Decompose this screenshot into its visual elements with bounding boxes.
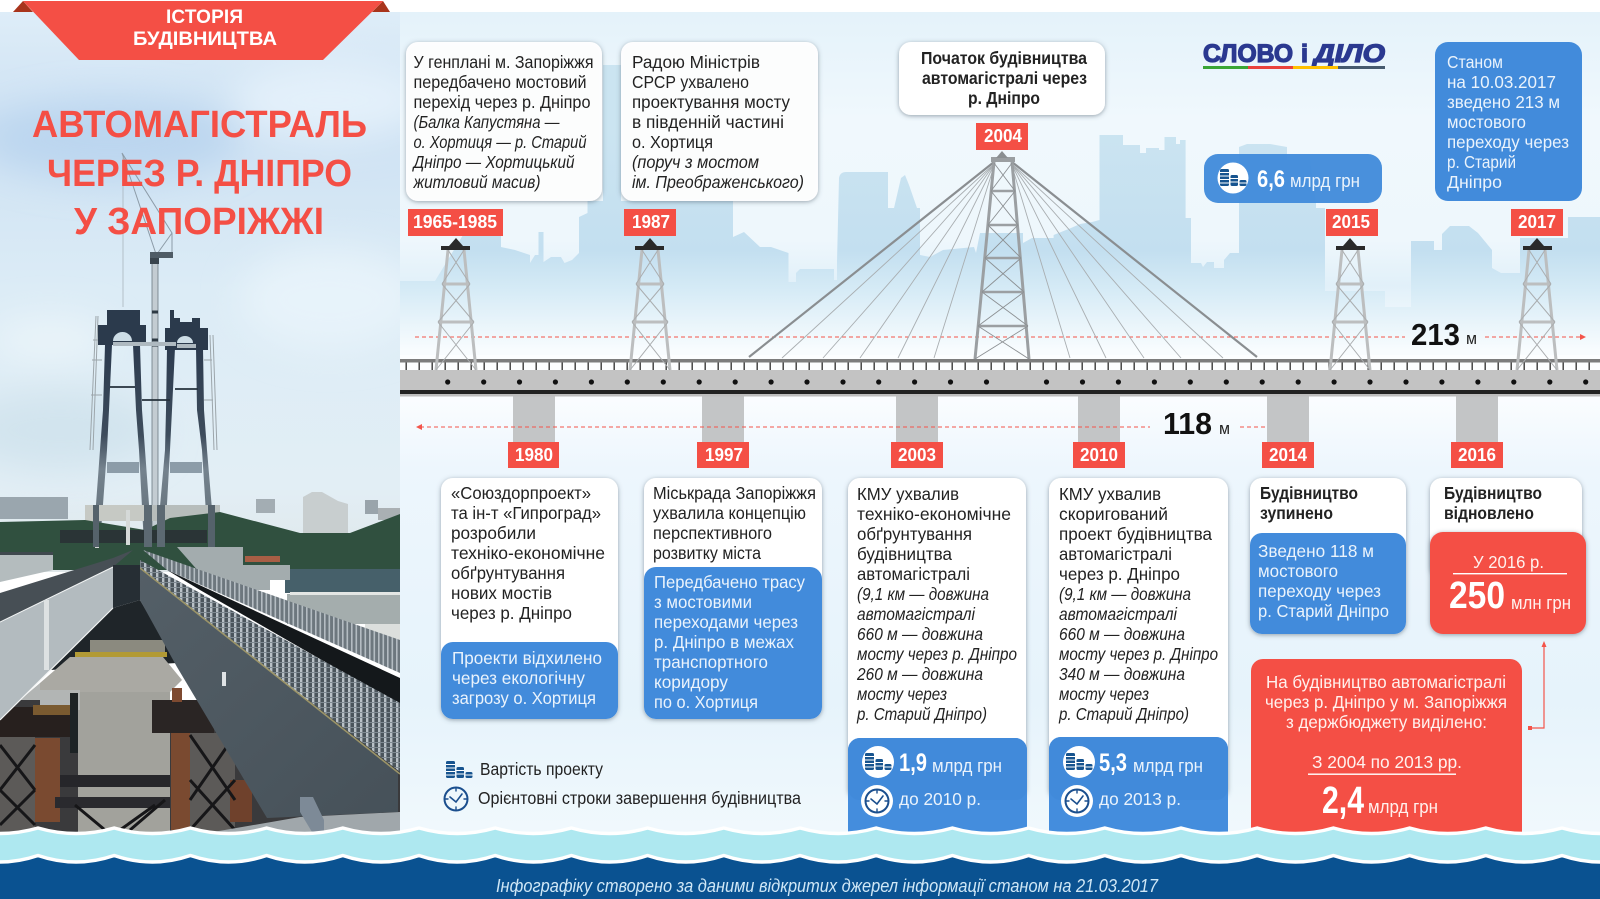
card 1965-1985: general plan: передбачено мостовий bbox=[414, 72, 586, 92]
city skyline silhouette bbox=[400, 65, 1600, 355]
card 2003: feasibility study bbox=[848, 478, 1027, 845]
card 2003: feasibility study: р. Старий Дніпро) bbox=[856, 704, 987, 724]
logo: Слово і Діло: і bbox=[1301, 40, 1308, 68]
card 1980: Soyuzdorproekt: розробили bbox=[451, 523, 536, 543]
panel: state budget funding: З 2004 по 2013 рр. bbox=[1312, 752, 1462, 772]
callout: 6,6 billion: млрд грн bbox=[1290, 171, 1360, 191]
year tag 2016 bbox=[1451, 442, 1503, 468]
card 2017: status as of 10.03.2017: р. Старий bbox=[1447, 152, 1516, 172]
value label 213 m: м bbox=[1466, 329, 1477, 348]
title bbox=[32, 104, 367, 243]
card 1980: Soyuzdorproekt: обґрунтування bbox=[451, 563, 565, 583]
card 2010: corrected project: автомагістралі bbox=[1059, 544, 1172, 564]
card 1965-1985: general plan: о. Хортиця — р. Старий bbox=[414, 132, 587, 152]
card 1987: Council of Ministers: Радою Міністрів bbox=[632, 52, 760, 72]
water waves bbox=[0, 828, 1600, 899]
card 1987: Council of Ministers: СРСР ухвалено bbox=[632, 72, 749, 92]
river and embankment bbox=[285, 569, 400, 593]
value label 118 m: 118 bbox=[1163, 406, 1212, 441]
card 2003: feasibility study: автомагістралі bbox=[857, 564, 970, 584]
year tag 2015: 2015 bbox=[1332, 212, 1370, 232]
year tag 2014 bbox=[1262, 442, 1314, 468]
logo: Слово і Діло: ДІЛО bbox=[1312, 40, 1386, 68]
ribbon header: БУДІВНИЦТВА bbox=[133, 29, 277, 50]
year tag 1987: 1987 bbox=[632, 212, 670, 232]
callout: 6,6 billion bbox=[1204, 154, 1382, 203]
card 2010: corrected project: млрд грн bbox=[1133, 756, 1203, 776]
card 2003: feasibility study: обґрунтування bbox=[857, 524, 972, 544]
card 2004: start of construction: р. Дніпро bbox=[968, 88, 1040, 108]
card 1997: city council: з мостовими bbox=[654, 592, 752, 612]
year tag 2017 bbox=[1511, 209, 1563, 236]
value label 213 m: 213 bbox=[1411, 317, 1460, 352]
panel: state budget funding: На будівництво автомагістралі bbox=[1266, 672, 1506, 692]
logo: Слово і Діло bbox=[1203, 40, 1386, 69]
card 1980: Soyuzdorproekt: загрозу о. Хортиця bbox=[452, 688, 596, 708]
card 2004: start of construction: автомагістралі через bbox=[922, 68, 1087, 88]
card 1965-1985: general plan: (Балка Капустяна — bbox=[414, 112, 560, 132]
card 2010: corrected project: КМУ ухвалив bbox=[1059, 484, 1161, 504]
card 1997: city council: розвитку міста bbox=[653, 543, 761, 563]
card 2010: corrected project: до 2013 р. bbox=[1099, 789, 1181, 809]
card 2017: status as of 10.03.2017: на 10.03.2017 bbox=[1447, 72, 1556, 92]
card 2003: feasibility study: КМУ ухвалив bbox=[857, 484, 959, 504]
far rail and slot bbox=[143, 550, 400, 673]
card 2016: construction resumed: Будівництво bbox=[1444, 483, 1542, 503]
card 2017: status as of 10.03.2017: зведено 213 м bbox=[1447, 92, 1560, 112]
card 1987: Council of Ministers bbox=[621, 42, 818, 201]
year tag 2010: 2010 bbox=[1080, 445, 1118, 465]
year tag 2004 bbox=[976, 123, 1028, 150]
ribbon header bbox=[13, 1, 390, 60]
year tag 2016: 2016 bbox=[1458, 445, 1496, 465]
main pylon with cables bbox=[749, 151, 1257, 359]
card 2014: construction stopped: переходу через bbox=[1258, 581, 1381, 601]
card 1980: Soyuzdorproekt: через р. Дніпро bbox=[451, 603, 572, 623]
panel: state budget funding bbox=[1251, 659, 1522, 845]
card 2010: corrected project bbox=[1049, 478, 1228, 845]
card 1980: Soyuzdorproekt: техніко-економічне bbox=[451, 543, 605, 563]
card 2003: feasibility study: 1,9 bbox=[899, 749, 927, 777]
bridge deck bbox=[400, 359, 1600, 396]
lower structure background bbox=[0, 700, 400, 840]
card 2017: status as of 10.03.2017 bbox=[1435, 42, 1582, 201]
year tag 2003: 2003 bbox=[898, 445, 936, 465]
card 1997: city council: переходами через bbox=[654, 612, 798, 632]
card 2004: start of construction: Початок будівництва bbox=[921, 48, 1087, 68]
card 2016: construction resumed bbox=[1430, 478, 1586, 634]
card 1997: city council: по о. Хортиця bbox=[654, 692, 758, 712]
card 1997: city council: Передбачено трасу bbox=[654, 572, 805, 592]
legend bbox=[444, 759, 801, 810]
ribbon header: ІСТОРІЯ bbox=[166, 7, 243, 28]
year tag 1997: 1997 bbox=[705, 445, 743, 465]
card 1997: city council: транспортного bbox=[654, 652, 768, 672]
title: У ЗАПОРІЖЖІ bbox=[74, 201, 324, 243]
page background bbox=[400, 12, 1600, 842]
card 2010: corrected project: 340 м — довжина bbox=[1059, 664, 1185, 684]
card 1987: Council of Ministers: проектування мосту bbox=[632, 92, 790, 112]
card 1997: city council: Міськрада Запоріжжя bbox=[653, 483, 816, 503]
city bbox=[0, 497, 68, 519]
small pylon 2015 bbox=[1330, 238, 1370, 370]
card 2014: construction stopped: Будівництво bbox=[1260, 483, 1358, 503]
card 1987: Council of Ministers: в південній частині bbox=[632, 112, 784, 132]
card 1987: Council of Ministers: о. Хортиця bbox=[632, 132, 713, 152]
legend: Вартість проекту bbox=[480, 759, 603, 779]
panel: state budget funding: з держбюджету виділено: bbox=[1286, 712, 1487, 732]
foreground deck bbox=[217, 812, 400, 832]
card 1997: city council: р. Дніпро в межах bbox=[654, 632, 794, 652]
card 2003: feasibility study: до 2010 р. bbox=[899, 789, 981, 809]
panel: state budget funding: млрд грн bbox=[1368, 797, 1438, 817]
card 2016: construction resumed: У 2016 р. bbox=[1473, 552, 1544, 572]
year tag 1980: 1980 bbox=[515, 445, 553, 465]
card 2003: feasibility study: автомагістралі bbox=[857, 604, 976, 624]
year tag 1980 bbox=[508, 442, 559, 468]
card 2017: status as of 10.03.2017: Дніпро bbox=[1447, 172, 1502, 192]
card 2003: feasibility study: мосту через bbox=[857, 684, 947, 704]
panel: state budget funding: через р. Дніпро у м. Запоріжжя bbox=[1265, 692, 1507, 712]
card 1965-1985: general plan: перехід через р. Дніпро bbox=[414, 92, 590, 112]
card 2010: corrected project: мосту через bbox=[1059, 684, 1149, 704]
panel: state budget funding: 2,4 bbox=[1322, 780, 1364, 822]
card 1965-1985: general plan: Дніпро — Хортицький bbox=[412, 152, 575, 172]
card 1980: Soyuzdorproekt: Проекти відхилено bbox=[452, 648, 602, 668]
year tag 2004: 2004 bbox=[984, 126, 1022, 146]
small pylon 1965-1985 bbox=[436, 238, 476, 370]
card 2003: feasibility study: техніко-економічне bbox=[857, 504, 1011, 524]
card 2003: feasibility study: будівництва bbox=[857, 544, 952, 564]
dimension line 213 m bbox=[415, 334, 1586, 340]
card 1997: city council: ухвалила концепцію bbox=[653, 503, 806, 523]
card 1997: city council bbox=[644, 478, 822, 719]
card 2014: construction stopped: р. Старий Дніпро bbox=[1258, 601, 1389, 621]
card 2016: construction resumed: відновлено bbox=[1444, 503, 1534, 523]
value label 118 m: м bbox=[1219, 419, 1230, 438]
card 2017: status as of 10.03.2017: мостового bbox=[1447, 112, 1526, 132]
year tag 1997 bbox=[697, 442, 749, 468]
card 2003: feasibility study: млрд грн bbox=[932, 756, 1002, 776]
card 2010: corrected project: проект будівництва bbox=[1059, 524, 1212, 544]
card 2017: status as of 10.03.2017: Станом bbox=[1447, 52, 1503, 72]
card 2003: feasibility study: мосту через р. Дніпро bbox=[857, 644, 1017, 664]
card 2003: feasibility study: 660 м — довжина bbox=[857, 624, 983, 644]
scaffolding bbox=[0, 688, 252, 840]
legend: Орієнтовні строки завершення будівництва bbox=[478, 788, 801, 808]
year tag 2003 bbox=[891, 442, 943, 468]
card 2003: feasibility study: 260 м — довжина bbox=[856, 664, 983, 684]
title: АВТОМАГІСТРАЛЬ bbox=[32, 104, 367, 146]
card 1997: city council: перспективного bbox=[653, 523, 772, 543]
card 2014: construction stopped: мостового bbox=[1258, 561, 1338, 581]
card 2010: corrected project: через р. Дніпро bbox=[1059, 564, 1180, 584]
card 1980: Soyuzdorproekt: «Союздорпроект» bbox=[451, 483, 591, 503]
card 1965-1985: general plan bbox=[406, 42, 602, 201]
card 2014: construction stopped bbox=[1250, 478, 1406, 634]
card 2004: start of construction bbox=[899, 42, 1105, 115]
near rail bbox=[140, 560, 400, 772]
crane bbox=[122, 153, 173, 548]
card 2010: corrected project: р. Старий Дніпро) bbox=[1058, 704, 1189, 724]
photo: bridge under construction bbox=[0, 12, 430, 840]
dimension line 118 m bbox=[416, 424, 1266, 430]
scaffold bbox=[90, 316, 217, 450]
card 1997: city council: коридору bbox=[654, 672, 728, 692]
year tag 1965-1985: 1965-1985 bbox=[413, 212, 497, 232]
trees bbox=[0, 512, 400, 570]
card 2010: corrected project: автомагістралі bbox=[1059, 604, 1178, 624]
callout: 6,6 billion: 6,6 bbox=[1257, 166, 1285, 193]
card 2017: status as of 10.03.2017: переходу через bbox=[1447, 132, 1569, 152]
card 2010: corrected project: 5,3 bbox=[1099, 749, 1127, 777]
year tag 1987 bbox=[624, 209, 676, 236]
card 2010: corrected project: скоригований bbox=[1059, 504, 1168, 524]
card 2014: construction stopped: зупинено bbox=[1260, 503, 1333, 523]
card 2016: construction resumed: млн грн bbox=[1511, 593, 1571, 613]
left girder bbox=[0, 550, 133, 622]
title: ЧЕРЕЗ Р. ДНІПРО bbox=[47, 153, 352, 195]
card 1987: Council of Ministers: ім. Преображенського) bbox=[632, 172, 804, 192]
bridge piers bbox=[513, 395, 1498, 443]
logo: Слово і Діло: СЛОВО bbox=[1203, 40, 1293, 68]
card 1980: Soyuzdorproekt bbox=[441, 478, 618, 719]
card 1987: Council of Ministers: (поруч з мостом bbox=[632, 152, 759, 172]
card 2014: construction stopped: Зведено 118 м bbox=[1258, 541, 1374, 561]
card 2010: corrected project: 660 м — довжина bbox=[1059, 624, 1185, 644]
card 2003: feasibility study: (9,1 км — довжина bbox=[857, 584, 989, 604]
card 1980: Soyuzdorproekt: та ін-т «Гипроград» bbox=[451, 503, 601, 523]
towers bbox=[96, 345, 212, 530]
year tag 2017: 2017 bbox=[1518, 212, 1556, 232]
year tag 2010 bbox=[1073, 442, 1125, 468]
small pylon 1987 bbox=[630, 238, 670, 370]
small pylon 2017 bbox=[1517, 238, 1557, 370]
year tag 2014: 2014 bbox=[1269, 445, 1307, 465]
card 1965-1985: general plan: У генплані м. Запоріжжя bbox=[414, 52, 594, 72]
card 1980: Soyuzdorproekt: через екологічну bbox=[452, 668, 585, 688]
card 1965-1985: general plan: житловий масив) bbox=[413, 172, 540, 192]
year tag 2015 bbox=[1326, 209, 1378, 236]
card 2016: construction resumed: 250 bbox=[1449, 575, 1505, 617]
card 1980: Soyuzdorproekt: нових мостів bbox=[451, 583, 552, 603]
year tag 1965-1985 bbox=[408, 209, 503, 236]
right girder bbox=[140, 568, 398, 818]
footer note: Інфографіку створено за даними відкритих джерел інформації станом на 21.03.2017 bbox=[496, 876, 1159, 896]
card 2010: corrected project: (9,1 км — довжина bbox=[1059, 584, 1191, 604]
arrow: funding to 2016 bbox=[1528, 641, 1546, 730]
card 2010: corrected project: мосту через р. Дніпро bbox=[1059, 644, 1218, 664]
